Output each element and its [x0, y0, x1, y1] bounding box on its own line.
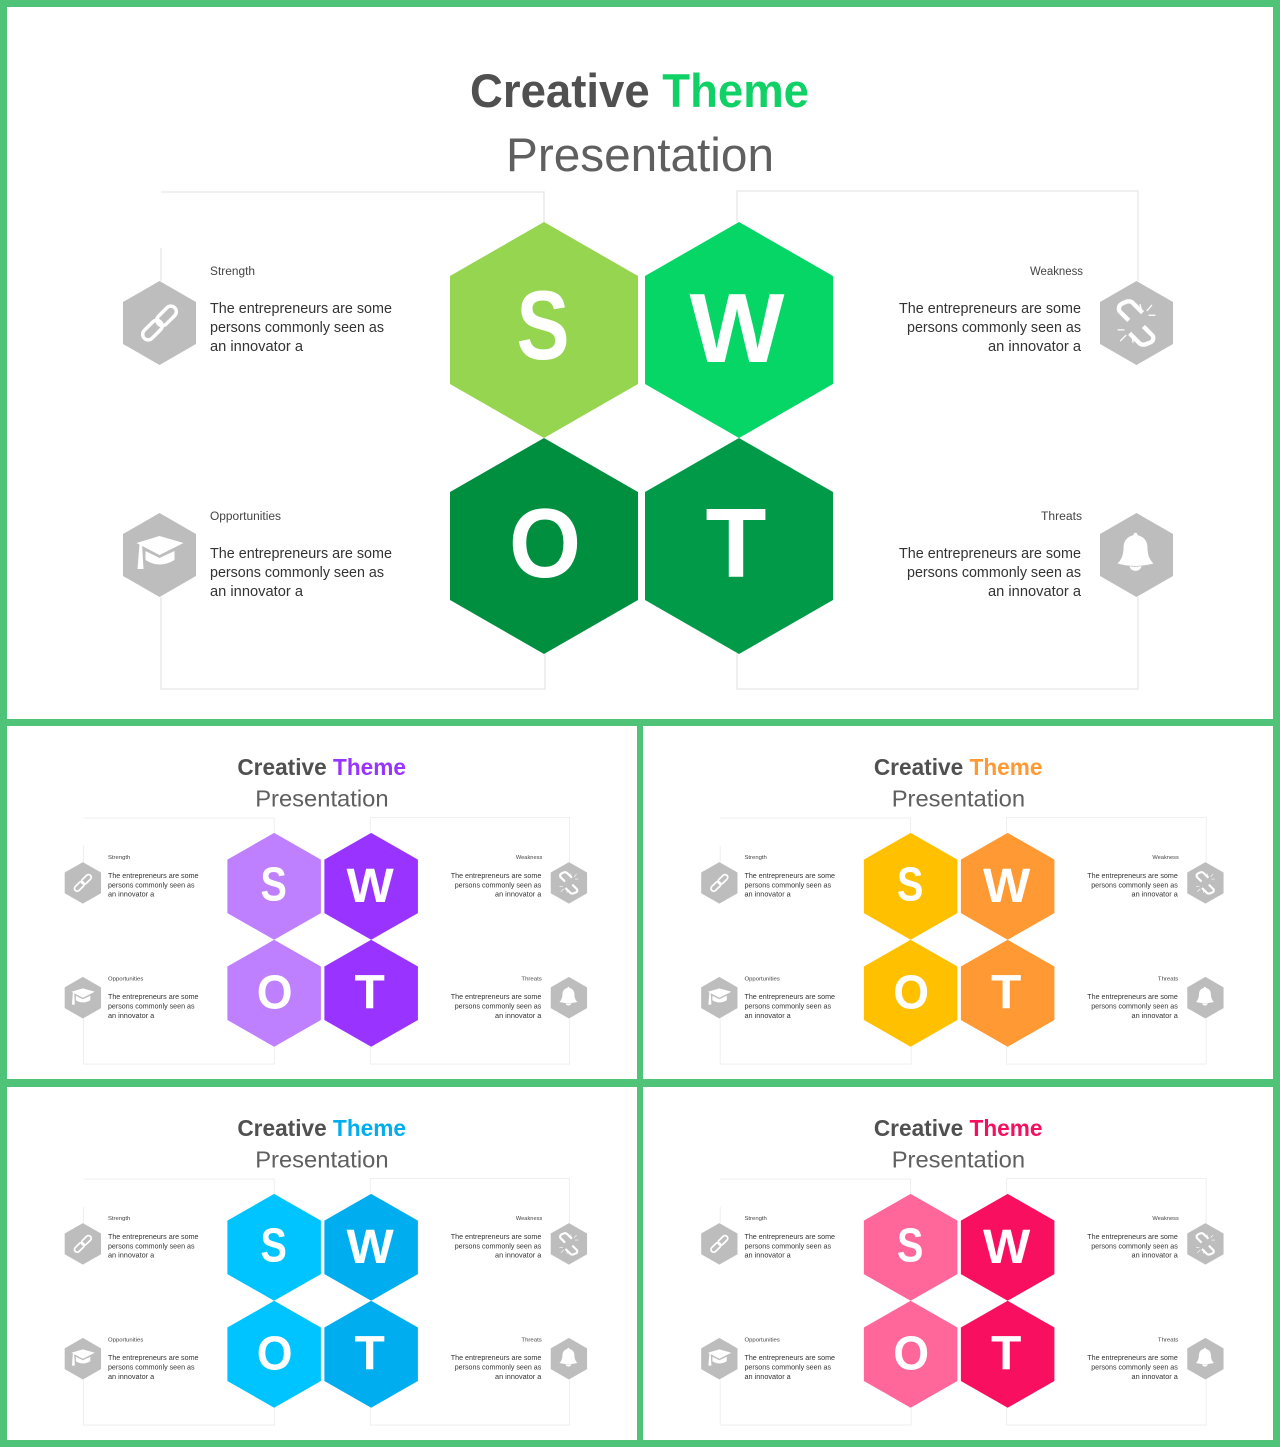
hexagon: O [864, 1301, 957, 1408]
text: strength: persons commonly seen as [744, 880, 831, 889]
icon: bell [1100, 513, 1173, 597]
text: weakness: persons commonly seen as [1091, 880, 1178, 889]
subtitle: Presentation [255, 786, 389, 812]
text: opportunities: The entrepreneurs are some [744, 1353, 835, 1362]
connector lines [84, 1179, 570, 1425]
text: strength: The entrepreneurs are some [744, 1232, 835, 1241]
text: opportunities: The entrepreneurs are some [108, 992, 199, 1001]
text: opportunities: Opportunities [744, 976, 780, 982]
text: opportunities [744, 1337, 835, 1381]
purple slide content [65, 754, 587, 1064]
icon: bell [1187, 977, 1224, 1019]
subtitle: Presentation [892, 786, 1025, 812]
pink slide content [701, 1115, 1224, 1425]
icon: link [65, 862, 101, 904]
text: strength: persons commonly seen as [108, 1241, 195, 1250]
hexagon: S [450, 222, 638, 438]
text: threats: persons commonly seen as [455, 1002, 542, 1011]
connector lines [84, 818, 570, 1064]
text: threats: an innovator a [1132, 1011, 1178, 1020]
hexagon: T: T [706, 488, 766, 598]
text: opportunities [108, 976, 199, 1020]
text: weakness: an innovator a [1132, 1251, 1178, 1260]
hexagon: W [961, 833, 1054, 940]
hexagon: T [961, 940, 1054, 1047]
text: weakness: Weakness [516, 855, 542, 861]
panel: purple slide [7, 726, 637, 1079]
text: weakness: The entrepreneurs are some [1087, 871, 1178, 880]
text: strength: an innovator a [744, 890, 791, 899]
text: strength: persons commonly seen as [108, 880, 195, 889]
icon: bell [551, 1338, 587, 1380]
hexagon: W [645, 222, 833, 438]
text: strength: persons commonly seen as [744, 1241, 831, 1250]
text: opportunities: The entrepreneurs are some [108, 1353, 199, 1362]
icon: bell [1187, 1338, 1224, 1380]
title: Creative Theme [237, 754, 406, 780]
hexagon: W [324, 1194, 418, 1301]
hexagon: W: W [347, 859, 394, 913]
text: weakness [1087, 855, 1179, 899]
icon: broken link [551, 862, 587, 904]
text: threats: Threats [1158, 976, 1178, 982]
text: opportunities: persons commonly seen as [108, 1363, 195, 1372]
text: threats: persons commonly seen as [1091, 1002, 1178, 1011]
hexagon: S [864, 833, 957, 940]
text: threats: The entrepreneurs are some [1087, 992, 1178, 1001]
hexagon: W [324, 833, 418, 940]
text: strength: The entrepreneurs are some [210, 301, 392, 317]
icon: graduation cap [65, 1338, 101, 1380]
text: threats: Threats [521, 1337, 542, 1343]
text: opportunities: Opportunities [108, 1337, 143, 1343]
text: strength [744, 855, 835, 899]
icon: broken link [1100, 281, 1173, 365]
text: threats: The entrepreneurs are some [451, 992, 541, 1001]
hexagon: T: T [354, 1327, 385, 1381]
text: weakness: Weakness [516, 1216, 542, 1222]
icon: bell [551, 977, 587, 1019]
subtitle: Presentation [506, 128, 774, 181]
text: threats: persons commonly seen as [907, 565, 1081, 581]
text: opportunities: an innovator a [108, 1372, 154, 1381]
text: weakness: an innovator a [495, 1251, 541, 1260]
hexagon: W: W [347, 1220, 394, 1274]
text: weakness: Weakness [1152, 855, 1179, 861]
text: opportunities: Opportunities [108, 976, 143, 982]
hexagon: O: O [509, 488, 581, 598]
text: threats: persons commonly seen as [1091, 1363, 1178, 1372]
text: opportunities: Opportunities [744, 1337, 780, 1343]
text: weakness: The entrepreneurs are some [899, 301, 1081, 317]
text: strength: The entrepreneurs are some [108, 1232, 199, 1241]
text: opportunities [744, 976, 835, 1020]
text: weakness: The entrepreneurs are some [451, 1232, 541, 1241]
icon: graduation cap [123, 513, 196, 597]
hexagon: O [864, 940, 957, 1047]
text: strength [210, 266, 392, 355]
hexagon: S [227, 833, 321, 940]
text: strength: persons commonly seen as [210, 320, 384, 336]
icon: link [701, 1223, 738, 1265]
text: opportunities: The entrepreneurs are some [210, 546, 392, 562]
text: weakness: The entrepreneurs are some [1087, 1232, 1178, 1241]
text: strength [108, 1216, 199, 1260]
hexagon: W: W [690, 273, 785, 383]
icon: graduation cap [65, 977, 101, 1019]
text: weakness: persons commonly seen as [907, 320, 1081, 336]
text: opportunities [210, 511, 392, 600]
text: weakness: Weakness [1152, 1216, 1179, 1222]
icon: graduation cap [701, 977, 738, 1019]
text: threats [1087, 1337, 1178, 1381]
text: threats: The entrepreneurs are some [451, 1353, 541, 1362]
title: Creative Theme [874, 754, 1043, 780]
text: strength: an innovator a [210, 339, 304, 355]
panel: orange slide [643, 726, 1273, 1079]
hexagon: T [324, 1301, 418, 1408]
panel: main green SWOT slide [7, 7, 1273, 719]
orange slide content [701, 754, 1224, 1064]
title: Creative Theme [874, 1115, 1043, 1141]
hexagon: O: O [893, 966, 929, 1020]
text: strength: The entrepreneurs are some [744, 871, 835, 880]
hexagon: O [227, 1301, 321, 1408]
text: strength: The entrepreneurs are some [108, 871, 199, 880]
hexagon: O: O [257, 966, 293, 1020]
icon: broken link [551, 1223, 587, 1265]
icon: broken link [1187, 862, 1224, 904]
hexagon: W: W [983, 1220, 1030, 1274]
text: opportunities: persons commonly seen as [744, 1363, 831, 1372]
hexagon: S: S [260, 858, 287, 912]
text: weakness: persons commonly seen as [455, 880, 542, 889]
text: weakness [451, 1216, 542, 1260]
hexagon: S [227, 1194, 321, 1301]
text: threats: The entrepreneurs are some [899, 546, 1081, 562]
text: strength: an innovator a [108, 1251, 154, 1260]
text: weakness: an innovator a [495, 890, 541, 899]
text: threats: persons commonly seen as [455, 1363, 542, 1372]
text: opportunities: The entrepreneurs are some [744, 992, 835, 1001]
hexagon: O [227, 940, 321, 1047]
icon: graduation cap [701, 1338, 738, 1380]
text: threats: Threats [1158, 1337, 1178, 1343]
subtitle: Presentation [892, 1147, 1025, 1173]
text: weakness: an innovator a [1132, 890, 1178, 899]
blue slide content [65, 1115, 587, 1425]
hexagon: W: W [983, 859, 1030, 913]
text: threats: an innovator a [988, 584, 1082, 600]
text: strength: an innovator a [744, 1251, 791, 1260]
hexagon: S: S [260, 1219, 287, 1273]
text: opportunities [108, 1337, 199, 1381]
title: Creative Theme [470, 64, 809, 117]
hexagon: O: O [893, 1327, 929, 1381]
hexagon: T: T [991, 1327, 1022, 1381]
text: threats: an innovator a [495, 1011, 541, 1020]
hexagon: S [864, 1194, 957, 1301]
text: opportunities: Opportunities [210, 511, 281, 523]
hexagon: T [645, 438, 833, 654]
connector lines [720, 818, 1206, 1064]
subtitle: Presentation [255, 1147, 389, 1173]
text: weakness: The entrepreneurs are some [451, 871, 541, 880]
hexagon: S: S [897, 858, 923, 912]
panel: pink slide [643, 1087, 1273, 1440]
hexagon: O [450, 438, 638, 654]
text: weakness: Weakness [1030, 266, 1083, 278]
text: opportunities: persons commonly seen as [108, 1002, 195, 1011]
text: weakness [899, 266, 1083, 355]
text: threats: Threats [521, 976, 542, 982]
text: weakness: persons commonly seen as [1091, 1241, 1178, 1250]
hexagon: O: O [257, 1327, 293, 1381]
panel: blue slide [7, 1087, 637, 1440]
text: threats [899, 511, 1082, 600]
text: strength: an innovator a [108, 890, 154, 899]
title: Creative Theme [237, 1115, 406, 1141]
hexagon: T [961, 1301, 1054, 1408]
text: opportunities: persons commonly seen as [744, 1002, 831, 1011]
text: opportunities: an innovator a [744, 1011, 791, 1020]
text: opportunities: an innovator a [210, 584, 304, 600]
connector lines [720, 1179, 1206, 1425]
hexagon: S: S [897, 1219, 923, 1273]
text: strength: Strength [210, 266, 255, 278]
hexagon: T: T [991, 966, 1022, 1020]
hexagon: S: S [516, 270, 570, 380]
text: weakness [451, 855, 542, 899]
text: weakness: persons commonly seen as [455, 1241, 542, 1250]
icon: link [65, 1223, 101, 1265]
icon: broken link [1187, 1223, 1224, 1265]
text: threats: The entrepreneurs are some [1087, 1353, 1178, 1362]
text: strength [744, 1216, 835, 1260]
hexagon: W [961, 1194, 1054, 1301]
connector lines [161, 191, 1138, 689]
hexagon: T: T [354, 966, 385, 1020]
text: strength [108, 855, 199, 899]
text: strength: Strength [744, 1216, 767, 1222]
text: strength: Strength [108, 1216, 130, 1222]
text: strength: Strength [744, 855, 767, 861]
text: threats [451, 976, 542, 1020]
text: threats [451, 1337, 542, 1381]
text: threats: an innovator a [495, 1372, 541, 1381]
text: opportunities: an innovator a [108, 1011, 154, 1020]
text: opportunities: persons commonly seen as [210, 565, 384, 581]
text: threats [1087, 976, 1178, 1020]
text: threats: an innovator a [1132, 1372, 1178, 1381]
text: strength: Strength [108, 855, 130, 861]
text: weakness [1087, 1216, 1179, 1260]
text: threats: Threats [1041, 511, 1082, 523]
icon: link [701, 862, 738, 904]
icon: link [123, 281, 196, 365]
text: weakness: an innovator a [988, 339, 1082, 355]
hexagon: T [324, 940, 418, 1047]
text: opportunities: an innovator a [744, 1372, 791, 1381]
